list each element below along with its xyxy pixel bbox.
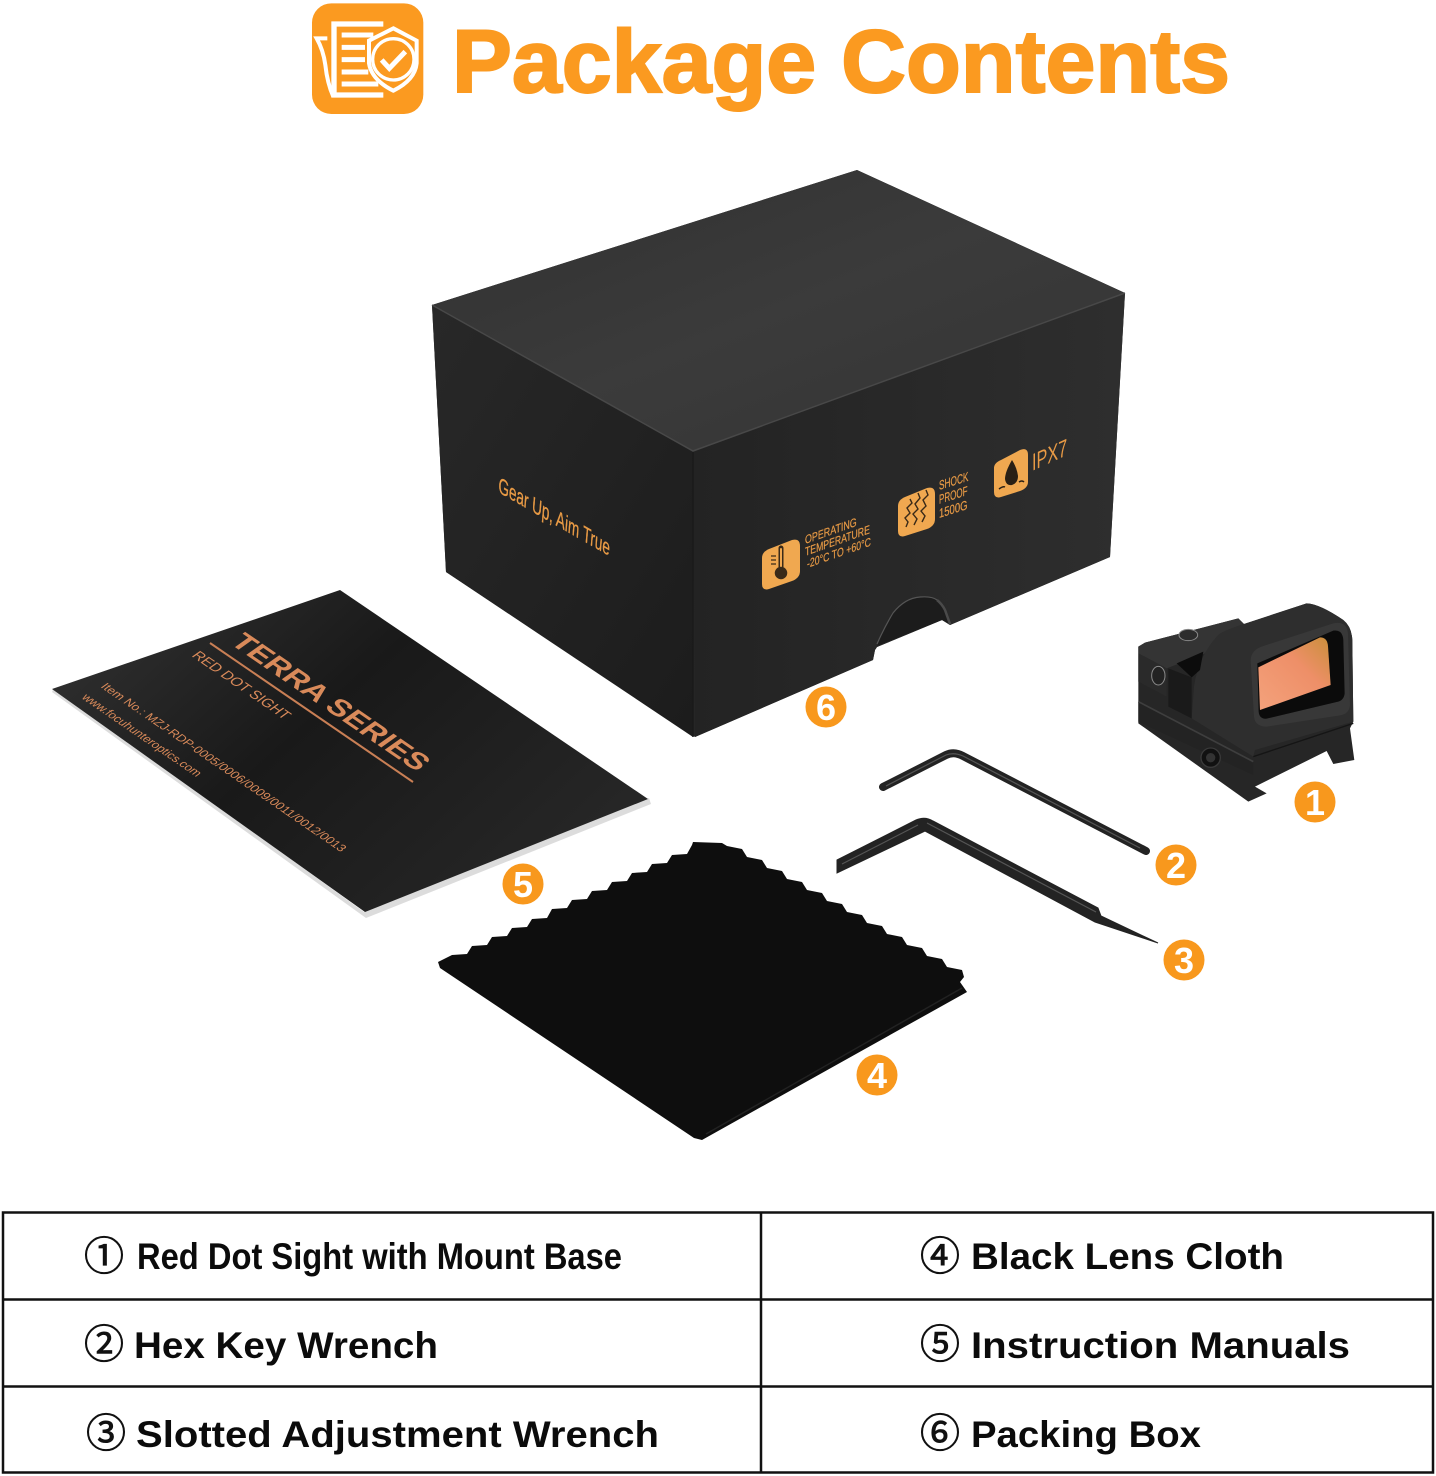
box feature: IPX7 (994, 435, 1067, 497)
row: hex key wrench (84, 1312, 438, 1370)
number badge 4: 4 (867, 1055, 887, 1096)
icon: document with shield check (312, 3, 423, 114)
manual item number: Item No.: MZJ-RDP-0005/0006/0009/0011/0012/0013 (98, 681, 350, 854)
number badge 5: 5 (513, 864, 533, 905)
number badge 2: 2 (1166, 845, 1186, 886)
row: slotted wrench: ③ (86, 1401, 126, 1459)
packing box (432, 170, 1125, 737)
red dot sight (1138, 603, 1354, 802)
row: hex key wrench: Hex Key Wrench (134, 1325, 438, 1366)
row: manuals: Instruction Manuals (971, 1325, 1350, 1366)
box feature: shock proof: 1500G (939, 497, 968, 521)
row: box: ⑥ (920, 1401, 960, 1459)
number badge 4 (856, 1054, 898, 1096)
row: red dot sight (84, 1224, 622, 1282)
lens cloth (438, 842, 967, 1140)
box feature: operating temperature: OPERATING (805, 515, 857, 547)
manual title: TERRA SERIES (224, 628, 438, 776)
row: slotted wrench (86, 1401, 659, 1459)
row: slotted wrench: Slotted Adjustment Wrench (136, 1414, 659, 1455)
box feature: IPX7: IPX7 (1032, 435, 1067, 477)
contents table (3, 1212, 1433, 1472)
box feature: operating temperature: -20°C TO +60°C (807, 534, 871, 571)
manual website: www.focuhunteroptics.com (78, 691, 206, 779)
manual subtitle: RED DOT SIGHT (188, 649, 294, 722)
instruction manual (52, 590, 651, 918)
number badge 6: 6 (816, 687, 836, 728)
row: manuals (920, 1312, 1350, 1370)
row: hex key wrench: ② (84, 1312, 124, 1370)
row: lens cloth (920, 1224, 1284, 1282)
row: manuals: ⑤ (920, 1312, 960, 1370)
number badge 3: 3 (1174, 940, 1194, 981)
hex key wrench (883, 753, 1146, 851)
row: lens cloth: Black Lens Cloth (971, 1236, 1284, 1277)
number badge 3 (1164, 940, 1204, 981)
row: red dot sight: ① (84, 1224, 124, 1282)
row: box: Packing Box (971, 1414, 1201, 1455)
box slogan: Gear Up, Aim True (498, 472, 611, 561)
row: box (920, 1401, 1201, 1459)
box feature: shock proof: SHOCK (939, 469, 969, 493)
box feature: shock proof (898, 469, 969, 536)
number badge 1 (1294, 782, 1336, 823)
number badge 5 (502, 864, 544, 905)
number badge 1: 1 (1305, 782, 1325, 823)
row: red dot sight: Red Dot Sight with Mount Base (137, 1236, 622, 1277)
number badge 2 (1156, 844, 1196, 886)
box feature: shock proof: PROOF (939, 483, 968, 507)
slotted adjustment wrench (837, 818, 1158, 943)
box feature: operating temperature: TEMPERATURE (805, 522, 870, 559)
row: lens cloth: ④ (920, 1224, 960, 1282)
title: Package Contents (452, 11, 1230, 111)
box feature: operating temperature (762, 515, 871, 589)
number badge 6 (806, 686, 846, 728)
